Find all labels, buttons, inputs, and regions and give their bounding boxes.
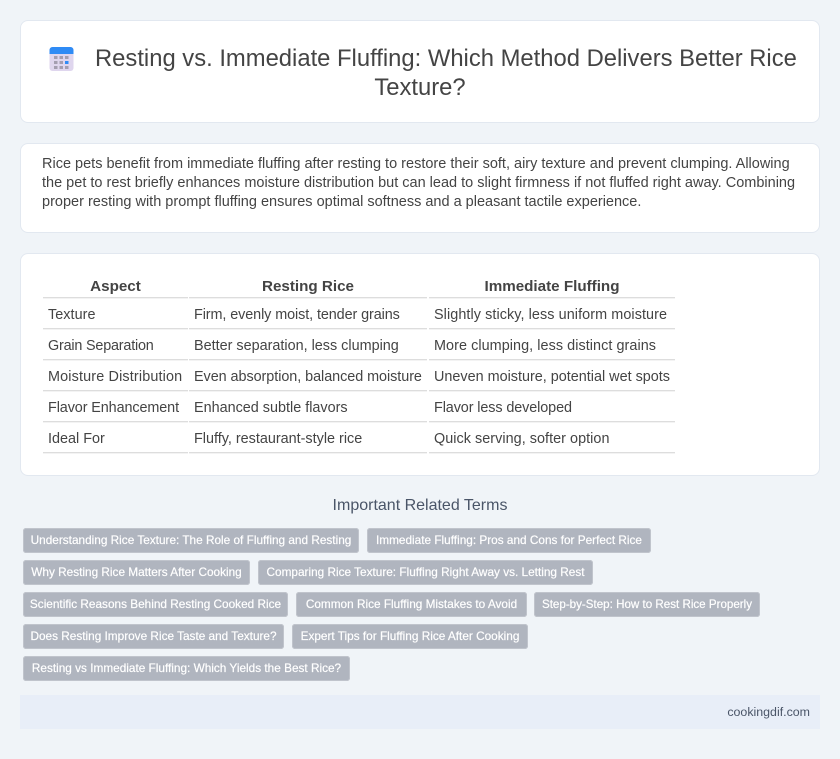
related term tags: Scientific Reasons Behind Resting Cooked Rice — [30, 597, 281, 611]
related term tags: Comparing Rice Texture: Fluffing Right Away vs. Letting Rest — [266, 565, 584, 579]
related term tags: Does Resting Improve Rice Taste and Texture? — [30, 629, 277, 643]
related terms heading: Important Related Terms — [333, 497, 507, 514]
title — [95, 45, 797, 101]
comparison table panel: More clumping, less distinct grains — [434, 338, 656, 354]
comparison table panel: Immediate Fluffing — [484, 278, 620, 295]
icon: calendar — [50, 47, 74, 71]
footer source text: cookingdif.com — [727, 705, 810, 719]
comparison table panel: Flavor less developed — [434, 400, 572, 416]
comparison table panel: Quick serving, softer option — [434, 431, 610, 447]
title: Resting vs. Immediate Fluffing: Which Method Delivers Better Rice — [95, 45, 797, 72]
comparison table panel: Aspect — [90, 278, 141, 295]
comparison table panel: Texture — [48, 307, 96, 323]
related term tags: Common Rice Fluffing Mistakes to Avoid — [306, 597, 517, 611]
related term tags: Expert Tips for Fluffing Rice After Cooking — [301, 629, 519, 643]
intro text: Rice pets benefit from immediate fluffing after resting to restore their soft, airy texture and prevent clumping. Allowing — [42, 156, 790, 172]
intro text: the pet to rest briefly enhances moisture distribution but can lead to slight firmness if not fluffed right away. Combining — [42, 175, 795, 191]
related term tags: Immediate Fluffing: Pros and Cons for Perfect Rice — [376, 533, 642, 547]
title: Texture? — [374, 74, 466, 101]
related term tags: Resting vs Immediate Fluffing: Which Yields the Best Rice? — [32, 661, 341, 675]
comparison table panel: Flavor Enhancement — [48, 400, 179, 416]
comparison table panel: Firm, evenly moist, tender grains — [194, 307, 400, 323]
comparison table panel: Moisture Distribution — [48, 369, 182, 385]
comparison table panel: Better separation, less clumping — [194, 338, 399, 354]
table header — [90, 278, 620, 295]
footer — [20, 695, 820, 729]
comparison table panel: Ideal For — [48, 431, 105, 447]
comparison table panel: Even absorption, balanced moisture — [194, 369, 422, 385]
related term tags: Why Resting Rice Matters After Cooking — [31, 565, 242, 579]
table rows — [43, 297, 675, 454]
comparison table panel: Grain Separation — [48, 338, 154, 354]
intro text: proper resting with prompt fluffing ensures optimal softness and a pleasant tactile experience. — [42, 194, 641, 210]
related term tags: Understanding Rice Texture: The Role of Fluffing and Resting — [31, 533, 351, 547]
intro text — [42, 156, 795, 210]
related term tags: Step-by-Step: How to Rest Rice Properly — [542, 598, 752, 611]
comparison table panel: Fluffy, restaurant-style rice — [194, 431, 362, 447]
intro panel — [20, 143, 820, 233]
comparison table panel: Slightly sticky, less uniform moisture — [434, 307, 667, 323]
comparison table panel: Enhanced subtle flavors — [194, 400, 348, 416]
comparison table panel: Resting Rice — [262, 278, 354, 295]
header panel — [20, 20, 820, 123]
comparison table panel: Uneven moisture, potential wet spots — [434, 369, 670, 385]
comparison table panel — [20, 253, 820, 476]
related term tags — [23, 528, 760, 681]
